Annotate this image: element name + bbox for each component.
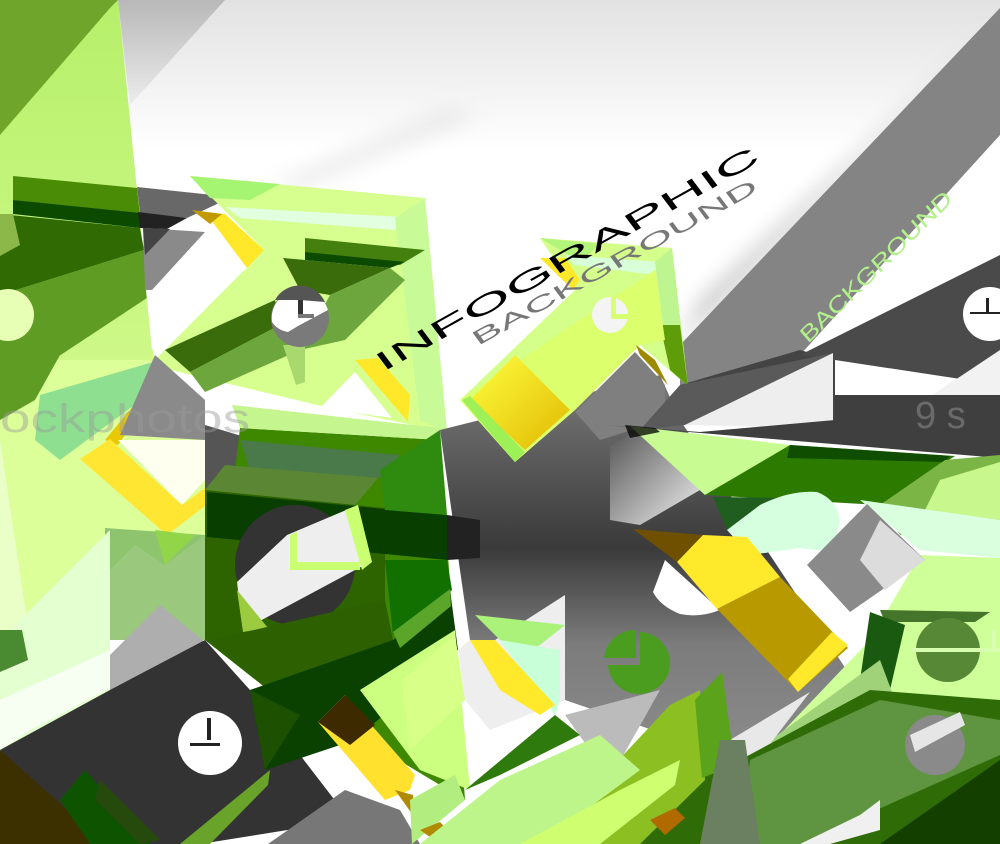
lower centre lime and yellow bbox=[268, 630, 470, 844]
centre-left pale triangle and gray bbox=[0, 528, 205, 760]
white strip beneath centre bbox=[458, 595, 565, 730]
watermark: ockphotos bbox=[0, 397, 250, 441]
icon: green pie right bbox=[912, 618, 1000, 682]
icon: pie on dark bbox=[271, 286, 329, 347]
icon: gray pie lower right bbox=[905, 712, 965, 775]
watermark right: 9 s bbox=[915, 395, 966, 437]
central big arrow bbox=[205, 405, 480, 800]
yellow bar right centre bbox=[633, 529, 848, 692]
icon: white pie on arrow bbox=[592, 297, 628, 333]
bottom green area bbox=[420, 672, 1000, 844]
icon: large dark pie with white band bbox=[235, 505, 372, 632]
icon: white clock pie bbox=[178, 711, 242, 775]
dark green wedge centre bbox=[180, 589, 458, 844]
icon: left partial pie bbox=[0, 289, 34, 341]
mint band and yellow chevron left bbox=[0, 350, 245, 535]
gray wedge top left bbox=[118, 0, 225, 105]
small lime and yellow panel bottom centre bbox=[465, 615, 580, 790]
icon: white pie right edge bbox=[963, 287, 1000, 341]
white pie segment under yellow bar bbox=[653, 560, 720, 615]
gray diagonal band right bbox=[680, 8, 1000, 400]
light gray beneath green pie bbox=[565, 690, 660, 770]
gray stripe highlight near centre bbox=[610, 430, 700, 525]
lower right panels bbox=[625, 425, 1000, 770]
subtitle: BACKGROUND bbox=[467, 176, 763, 350]
title: INFOGRAPHIC bbox=[369, 141, 765, 377]
top centre arrow bbox=[143, 176, 447, 432]
green label: BACKGROUND bbox=[795, 185, 957, 348]
icon: green pie centre bbox=[604, 630, 670, 694]
second arrow top middle bbox=[460, 238, 835, 462]
dark bars top left bbox=[0, 176, 232, 395]
dark band lower left bbox=[0, 640, 350, 844]
left column lime bbox=[0, 0, 205, 640]
gray strip and white triangle right bbox=[605, 255, 1000, 458]
middle gray field bbox=[440, 375, 860, 760]
